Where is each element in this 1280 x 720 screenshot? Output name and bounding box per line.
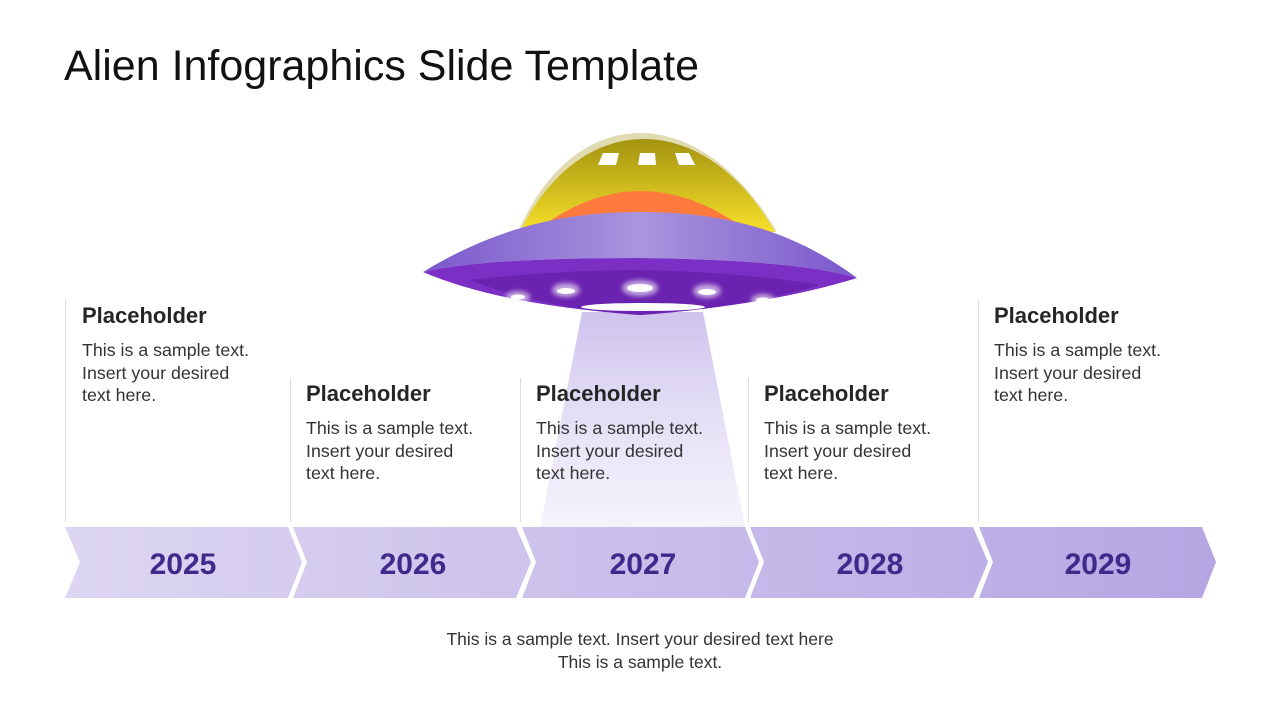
text block 3: text here. [536,463,610,483]
beam [540,312,745,527]
graphic: ufo with beam and timeline: 2028 [837,548,903,581]
text block 4: This is a sample text. [764,418,931,438]
graphic: ufo with beam and timeline: 2029 [1065,548,1131,581]
text block 2: text here. [306,463,380,483]
text block 5: Insert your desired [994,362,1141,382]
text block 5: Placeholder [994,303,1119,328]
graphic: ufo with beam and timeline: 2026 [380,548,446,581]
text block 2: This is a sample text. [306,418,473,438]
text block 4: text here. [764,463,838,483]
text block 1: Insert your desired [82,362,229,382]
text block 1: text here. [82,385,156,405]
text block 1: This is a sample text. [82,340,249,360]
text block 3: This is a sample text. [536,418,703,438]
text block 5: text here. [994,385,1068,405]
text block 3 [536,381,703,483]
footer text: This is a sample text. Insert your desired text here [446,629,834,649]
text block 4: Placeholder [764,381,889,406]
text block 5: This is a sample text. [994,340,1161,360]
text block 2: Placeholder [306,381,431,406]
footer text: This is a sample text. [558,652,722,672]
text block 1 [82,303,249,405]
ufo [423,133,857,315]
text block 3: Placeholder [536,381,661,406]
title: Alien Infographics Slide Template [64,42,699,90]
text block 5 [994,303,1161,405]
text block 4 [764,381,931,483]
graphic: ufo with beam and timeline: 2025 [150,548,216,581]
graphic: ufo with beam and timeline: 2027 [610,548,676,581]
text block 4: Insert your desired [764,440,911,460]
timeline chevrons [65,527,1216,598]
text block 3: Insert your desired [536,440,683,460]
text block 1: Placeholder [82,303,207,328]
text block 2 [306,381,473,483]
text block 2: Insert your desired [306,440,453,460]
footer text [446,629,834,672]
